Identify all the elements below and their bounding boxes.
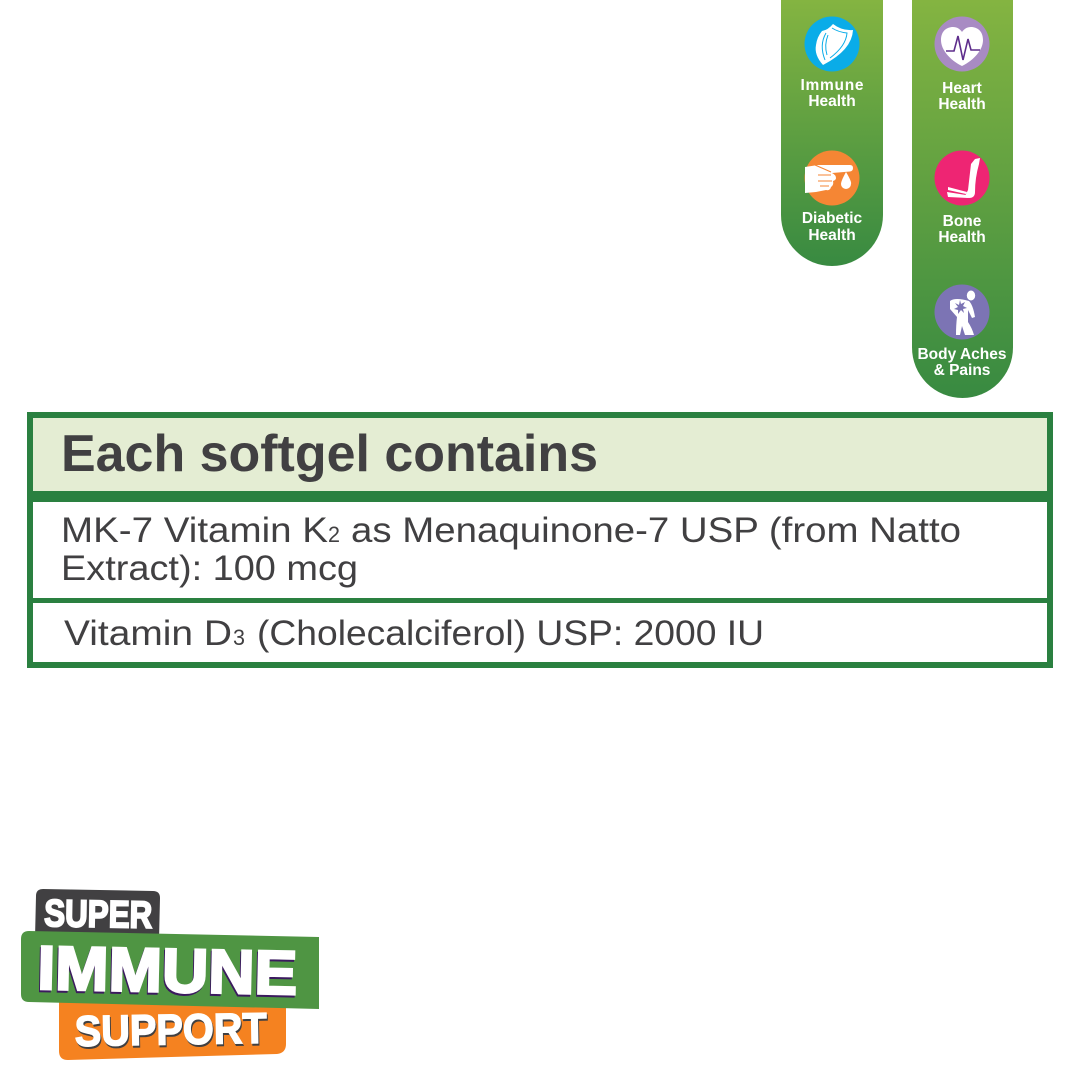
icon: heart health <box>934 16 990 72</box>
row 1 text <box>61 511 961 588</box>
label: Immune Health: Health <box>808 93 856 110</box>
row 1 background <box>33 502 1047 598</box>
row 2 background <box>33 603 1047 662</box>
badge: IMMUNE band: IMMUNE <box>37 934 298 1008</box>
panel: right benefits ribbon <box>912 0 1013 398</box>
icon: immune shield <box>804 16 860 72</box>
row 2 text: Vitamin D <box>64 614 232 653</box>
panel: softgel contents table <box>27 412 1053 668</box>
label: Bone Health: Bone <box>943 213 982 230</box>
label: Body Aches and Pains: & Pains <box>934 362 990 379</box>
row 1 text: 2 <box>328 522 340 547</box>
panel: left benefits ribbon <box>781 0 883 266</box>
label: Bone Health: Health <box>938 229 986 246</box>
row 1 text: MK-7 Vitamin K <box>61 511 328 550</box>
badge: SUPPORT tab: SUPPORT <box>74 1005 267 1056</box>
label: Heart Health: Health <box>938 96 986 113</box>
row 1 text: Extract): 100 mcg <box>61 549 358 588</box>
label: Heart Health: Heart <box>942 80 982 97</box>
badge: SUPER tab: SUPER <box>44 893 153 937</box>
row 2 text <box>64 614 764 653</box>
badge: super immune support <box>21 889 319 1060</box>
heading: Each softgel contains <box>61 425 598 483</box>
row 2 text: (Cholecalciferol) USP: 2000 IU <box>257 614 764 653</box>
label: Immune Health: Immune <box>800 77 864 94</box>
icon: body aches <box>934 284 990 340</box>
table frame <box>27 412 1053 668</box>
row 1 text: as Menaquinone-7 USP (from Natto <box>351 511 961 550</box>
icon: diabetic finger with drop <box>804 150 860 206</box>
icon: bone health <box>934 150 990 206</box>
badge: SUPPORT tab: SUPPORT <box>75 1007 268 1058</box>
label: Diabetic Health: Health <box>808 227 856 244</box>
row 2 text: 3 <box>233 625 245 650</box>
label: Diabetic Health: Diabetic <box>802 210 863 227</box>
badge: IMMUNE band: IMMUNE <box>36 936 297 1010</box>
table header band <box>33 418 1047 491</box>
ribbon shape left <box>781 0 883 266</box>
ribbon shape right <box>912 0 1013 398</box>
label: Body Aches and Pains: Body Aches <box>917 346 1007 363</box>
